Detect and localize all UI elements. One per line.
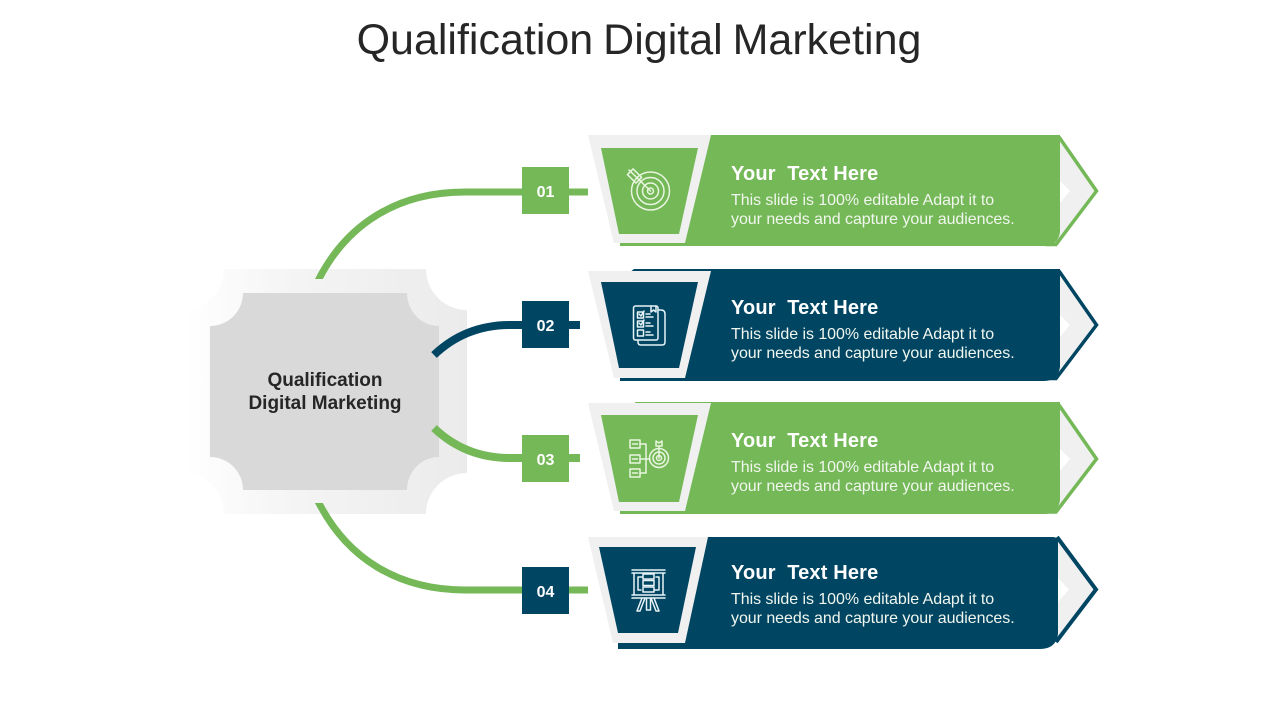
card 02 band <box>620 269 1060 381</box>
card 04 heading: Your Text Here <box>731 562 878 584</box>
number badge 03 <box>522 435 569 482</box>
central shape: inner plate <box>210 293 439 490</box>
central label: Qualification <box>267 370 383 391</box>
card 01 frame <box>588 135 711 243</box>
card 01 band <box>620 135 1060 246</box>
title: Qualification Digital Marketing <box>357 16 921 64</box>
card 03 frame <box>588 403 711 511</box>
card 02 frame <box>588 271 711 378</box>
card 04 body: This slide is 100% editable Adapt it to <box>731 591 994 608</box>
card 04 band <box>618 537 1058 649</box>
number badge 04 <box>522 567 569 614</box>
card 01 heading: Your Text Here <box>731 163 878 185</box>
panel: card 01 <box>588 135 1096 246</box>
number badge 01 <box>522 167 569 214</box>
card 03 band <box>620 402 1060 514</box>
panel: card 03 <box>588 402 1096 514</box>
card 04 arrow <box>1056 537 1096 642</box>
card 04 icon tile <box>599 547 696 633</box>
card 02 icon tile <box>601 282 698 368</box>
card 02 body: This slide is 100% editable Adapt it to <box>731 326 994 343</box>
card 04 frame <box>588 537 708 643</box>
icon: presentation board <box>632 570 665 611</box>
card 03 arrow <box>1045 405 1096 512</box>
number badge 02 <box>522 301 569 348</box>
card 01 body: This slide is 100% editable Adapt it to <box>731 192 994 209</box>
card 02 body: your needs and capture your audiences. <box>731 345 1015 362</box>
connector: 03 <box>434 428 580 458</box>
card 03 body: This slide is 100% editable Adapt it to <box>731 459 994 476</box>
card 03 icon tile <box>601 415 698 502</box>
connector: 01 <box>315 192 588 287</box>
connector: 04 <box>315 495 588 590</box>
panel: card 04 <box>588 537 1096 649</box>
card 04 body: your needs and capture your audiences. <box>731 610 1015 627</box>
card 01 arrow <box>1045 137 1096 244</box>
central label: Digital Marketing <box>248 393 402 414</box>
icon: process to target <box>630 440 668 477</box>
card 02 heading: Your Text Here <box>731 297 878 319</box>
card 03 heading: Your Text Here <box>731 430 878 452</box>
card 02 arrow <box>1045 271 1096 378</box>
number badge 01: 01 <box>537 184 554 201</box>
panel: card 02 <box>588 269 1096 381</box>
card 01 body: your needs and capture your audiences. <box>731 211 1015 228</box>
number badge 02: 02 <box>537 318 554 335</box>
number badge 04: 04 <box>537 584 554 601</box>
central shape: outer plate <box>183 269 467 514</box>
card 03 body: your needs and capture your audiences. <box>731 478 1015 495</box>
card 01 icon tile <box>601 148 698 234</box>
connector: 02 <box>434 325 580 355</box>
icon: target with arrow <box>627 169 670 210</box>
icon: checklist <box>634 306 665 345</box>
central shape <box>183 269 467 514</box>
number badge 03: 03 <box>537 452 554 469</box>
